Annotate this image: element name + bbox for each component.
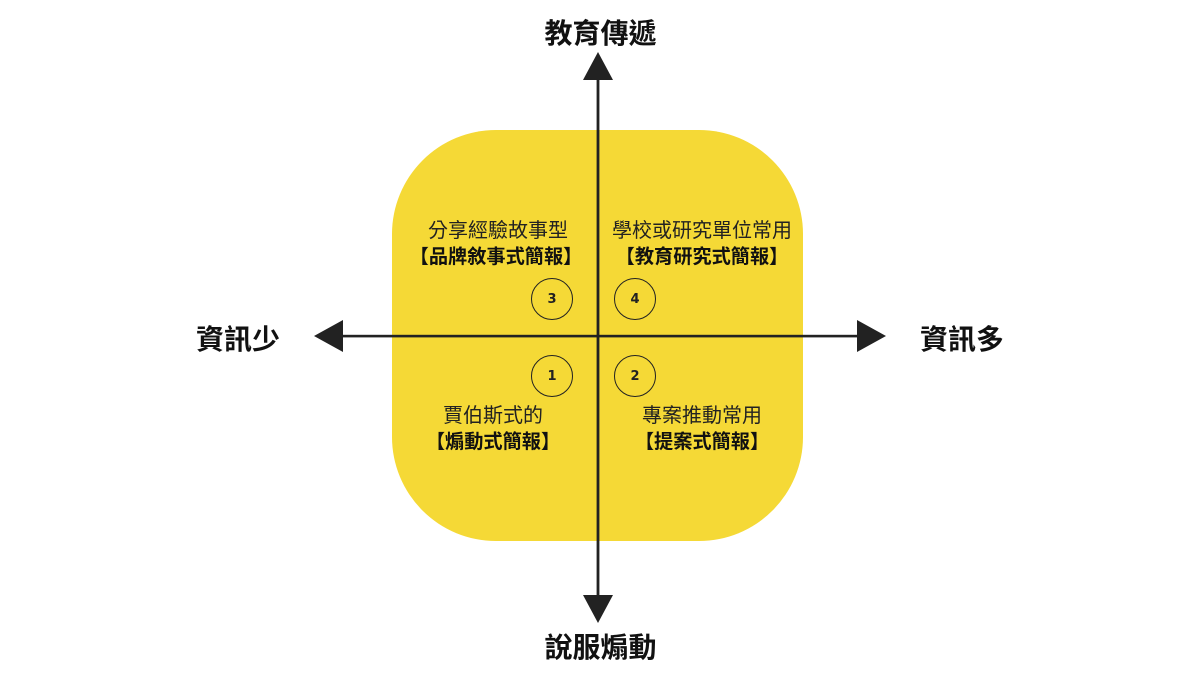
axis label: right: 資訊多: [920, 324, 1004, 355]
arrow: horizontal axis: [314, 320, 886, 352]
number circle 3: 3: [547, 292, 557, 307]
quadrant 2 text: [635, 405, 769, 453]
quadrant 2 text: 【提案式簡報】: [635, 432, 769, 453]
quadrant 1 text: [426, 405, 560, 453]
axis label: bottom: 說服煽動: [544, 632, 656, 663]
quadrant 3 text: [410, 220, 582, 268]
number circle 2: [614, 355, 656, 397]
yellow rounded square panel: [392, 130, 803, 541]
number circle 3: [531, 278, 573, 320]
axis label: left: 資訊少: [196, 324, 280, 355]
number circle 4: 4: [630, 292, 640, 307]
quadrant 4 text: [612, 220, 792, 268]
number circle 1: 1: [547, 369, 557, 384]
arrow: vertical axis: [583, 52, 613, 623]
number circle 2: 2: [630, 369, 640, 384]
quadrant 2 text: 專案推動常用: [642, 405, 762, 427]
quadrant 1 text: 賈伯斯式的: [443, 405, 543, 427]
quadrant 3 text: 分享經驗故事型: [428, 220, 568, 242]
quadrant 1 text: 【煽動式簡報】: [426, 432, 560, 453]
quadrant 3 text: 【品牌敘事式簡報】: [410, 247, 582, 268]
number circle 1: [531, 355, 573, 397]
quadrant 4 text: 【教育研究式簡報】: [616, 247, 788, 268]
quadrant 4 text: 學校或研究單位常用: [612, 220, 792, 242]
number circle 4: [614, 278, 656, 320]
axis label: top: 教育傳遞: [544, 18, 656, 49]
